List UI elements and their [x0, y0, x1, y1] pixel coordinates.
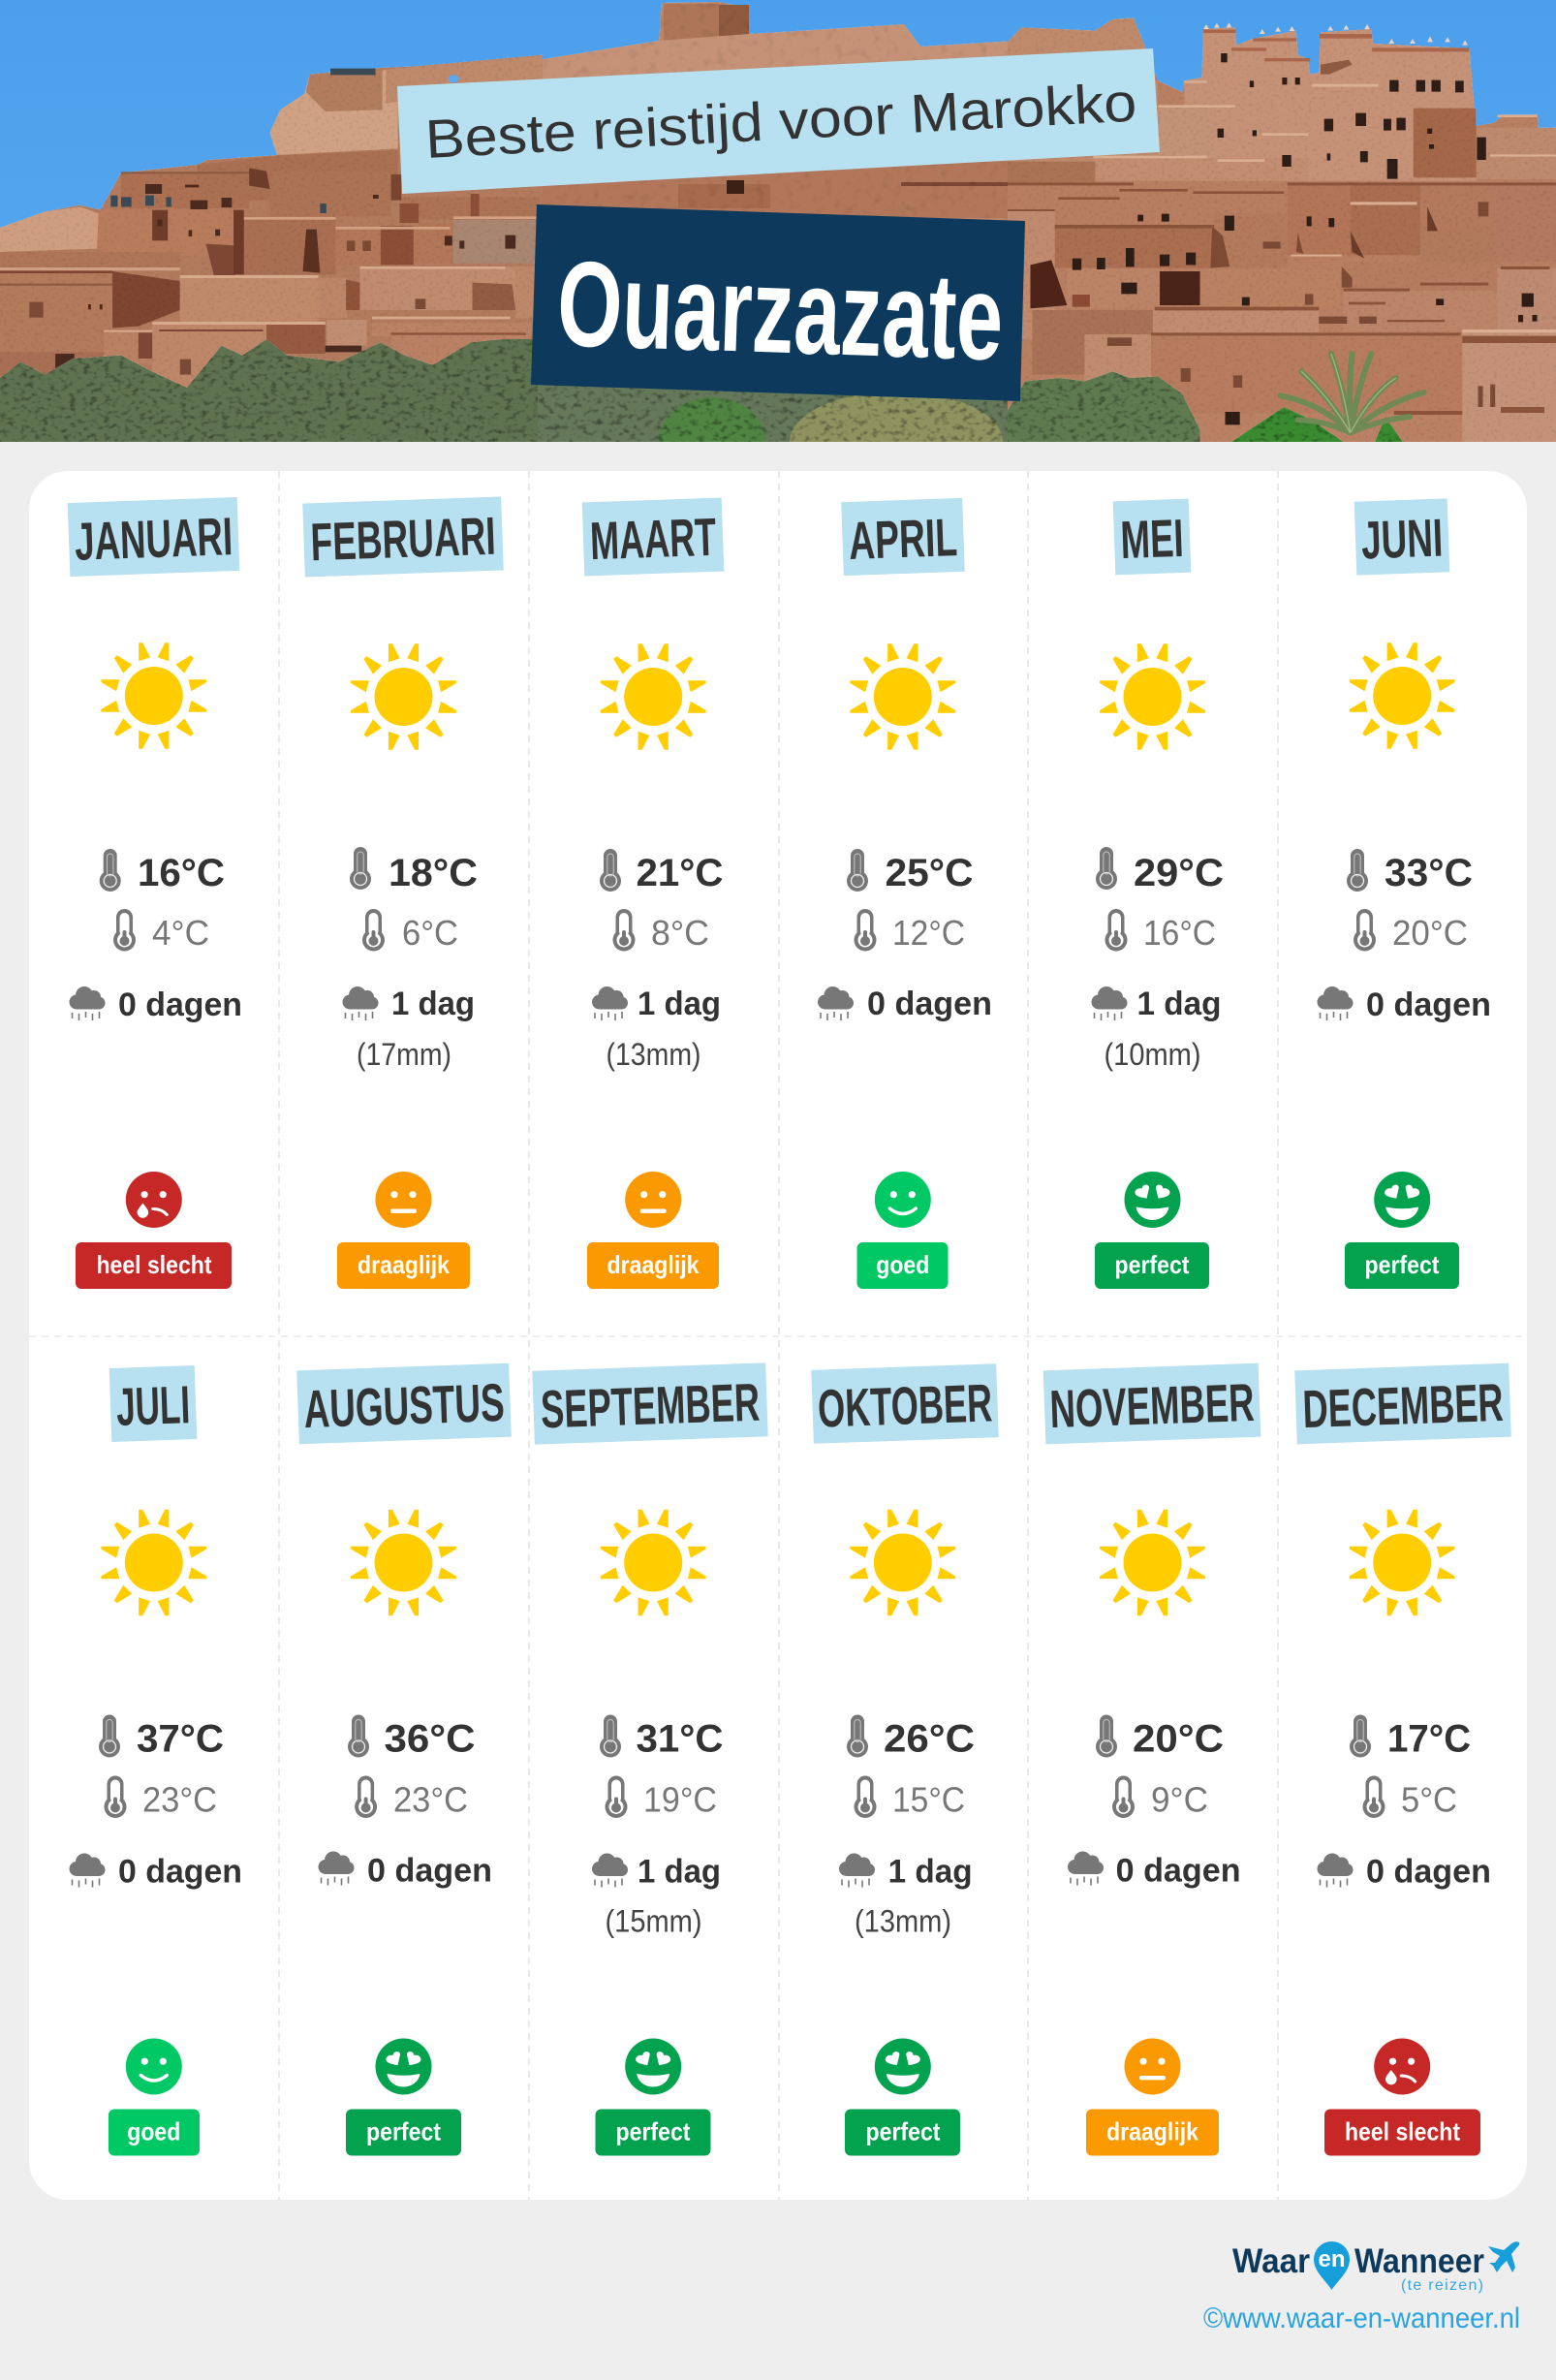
min temperature: 20°C [1392, 913, 1468, 953]
rating badge [856, 1242, 948, 1289]
rating badge [1345, 1242, 1459, 1289]
month label: APRIL [848, 507, 958, 571]
month label [811, 1363, 999, 1444]
photo: right section [1008, 17, 1556, 442]
month label: JUNI [1360, 508, 1444, 570]
icon: sun [1350, 1510, 1455, 1615]
month: juni [1318, 498, 1491, 1289]
trees right [1008, 371, 1200, 442]
rating badge [337, 1242, 470, 1289]
icon: min thermometer [1105, 909, 1128, 952]
max temperature: 31°C [636, 1717, 723, 1760]
icon: min thermometer [1112, 1775, 1135, 1818]
rating badge: goed [876, 1250, 929, 1279]
icon: sun [351, 643, 456, 750]
month label: JANUARI [74, 506, 233, 572]
icon: rain cloud [839, 1853, 875, 1888]
rain days: 0 dagen [1366, 1853, 1491, 1890]
icon: max thermometer [847, 849, 868, 892]
rating face: very bad [1374, 2039, 1430, 2095]
month label: FEBRUARI [310, 506, 497, 572]
month label: SEPTEMBER [540, 1372, 761, 1439]
month label [841, 498, 965, 576]
footer logo: Wanneer [1354, 2242, 1484, 2280]
rating badge: draaglijk [607, 1250, 700, 1279]
rain days: 1 dag [638, 1853, 721, 1890]
footer url: ©www.waar-en-wanneer.nl [1203, 2302, 1520, 2334]
month label [109, 1365, 197, 1442]
rating face: perfect [1374, 1172, 1430, 1228]
rating badge [109, 2109, 200, 2155]
rain days: 0 dagen [118, 986, 242, 1023]
panel: monthly climate grid [29, 471, 1527, 2200]
banner: subtitle [397, 48, 1160, 194]
icon: sun [101, 642, 206, 749]
rating badge [845, 2109, 960, 2155]
icon: rain cloud [318, 1851, 355, 1886]
rain days: 1 dag [638, 986, 721, 1022]
rating face: tolerable [376, 1172, 432, 1228]
row 2: juli to december [70, 1362, 1511, 2155]
icon: rain cloud [1068, 1851, 1104, 1886]
month: september [532, 1362, 768, 2155]
icon: min thermometer [612, 909, 636, 952]
rain days: 1 dag [391, 986, 475, 1022]
month label: MEI [1120, 508, 1185, 570]
icon: location pin [1314, 2241, 1350, 2290]
icon: max thermometer [100, 849, 121, 892]
icon: sun [351, 1510, 456, 1615]
icon: min thermometer [1354, 909, 1376, 952]
icon: max thermometer [1096, 1715, 1117, 1758]
rating face: perfect [376, 2039, 432, 2095]
rating badge: goed [127, 2116, 180, 2145]
rating face: tolerable [1124, 2039, 1180, 2095]
rating badge: perfect [1114, 1250, 1190, 1279]
icon: sun [101, 1510, 206, 1615]
month label: MAART [589, 507, 717, 571]
icon: min thermometer [113, 909, 136, 952]
banner: city title: Ouarzazate [555, 236, 1005, 386]
rain amount: (15mm) [605, 1903, 701, 1938]
icon: min thermometer [1362, 1775, 1385, 1818]
rating badge [587, 1242, 719, 1289]
rain days: 0 dagen [367, 1853, 492, 1890]
rain amount: (13mm) [855, 1903, 951, 1938]
icon: max thermometer [99, 1715, 120, 1758]
min temperature: 4°C [152, 913, 209, 953]
month label [1354, 498, 1449, 576]
icon: rain cloud [818, 986, 854, 1020]
rain days: 0 dagen [867, 986, 992, 1022]
month: maart [582, 498, 724, 1289]
month label [582, 498, 724, 576]
icon: max thermometer [348, 1715, 369, 1758]
header photo: kasbah [0, 0, 1556, 442]
icon: rain cloud [1091, 986, 1128, 1020]
icon: max thermometer [350, 847, 371, 890]
month: mei [1091, 499, 1224, 1289]
icon: rain cloud [592, 1853, 628, 1888]
trees left [0, 339, 543, 442]
rating badge: heel slecht [97, 1250, 212, 1279]
rating badge: draaglijk [1106, 2116, 1198, 2145]
max temperature: 25°C [886, 852, 973, 894]
icon: min thermometer [105, 1775, 126, 1818]
max temperature: 18°C [389, 852, 478, 894]
rating face: very bad [126, 1172, 182, 1228]
min temperature: 9°C [1151, 1779, 1208, 1820]
month label [1043, 1363, 1260, 1444]
icon: rain cloud [592, 986, 628, 1020]
month: februari [302, 496, 504, 1289]
rain days: 0 dagen [1116, 1853, 1241, 1890]
month label [532, 1362, 768, 1445]
icon: sun [1350, 642, 1455, 749]
month: juli [70, 1365, 242, 2155]
max temperature: 26°C [884, 1717, 975, 1760]
icon: sun [850, 1510, 955, 1615]
rain amount: (13mm) [607, 1037, 701, 1072]
rain amount: (10mm) [1105, 1037, 1201, 1072]
max temperature: 36°C [384, 1717, 475, 1760]
rating face: good [875, 1172, 931, 1228]
rating badge [1095, 1242, 1209, 1289]
photo: left section [0, 54, 543, 442]
icon: min thermometer [855, 1775, 876, 1818]
row 1: januari to juni [68, 496, 1491, 1289]
month: december [1294, 1363, 1511, 2155]
icon: max thermometer [600, 1715, 621, 1758]
icon: rain cloud [70, 1853, 105, 1888]
month: oktober [811, 1363, 999, 2155]
rating badge: perfect [866, 2116, 941, 2145]
photo: lower middle trees [538, 334, 1022, 442]
icon: rain cloud [1318, 986, 1353, 1020]
max temperature: 29°C [1134, 852, 1224, 894]
rating badge: heel slecht [1345, 2116, 1460, 2145]
footer logo: Waar [1232, 2242, 1310, 2280]
icon: max thermometer [1096, 847, 1117, 890]
icon: max thermometer [1347, 849, 1368, 892]
max temperature: 21°C [636, 852, 723, 894]
rating badge [1086, 2109, 1219, 2155]
icon: location pin: en [1318, 2246, 1346, 2272]
rating face: good [126, 2039, 182, 2095]
max temperature: 33°C [1385, 852, 1473, 894]
icon: airplane [1488, 2241, 1519, 2272]
icon: rain cloud [343, 986, 378, 1020]
rating face: perfect [875, 2039, 931, 2095]
banner: city title [531, 204, 1025, 401]
month label [296, 1363, 512, 1444]
footer logo [1232, 2241, 1519, 2294]
month label [1113, 499, 1191, 575]
rating badge [76, 1242, 232, 1289]
rain days: 0 dagen [1366, 986, 1491, 1023]
icon: sun [850, 643, 955, 750]
min temperature: 15°C [892, 1779, 965, 1820]
icon: min thermometer [605, 1775, 628, 1818]
month: april [818, 498, 992, 1289]
rating badge [595, 2109, 711, 2155]
icon: max thermometer [600, 849, 621, 892]
icon: sun [1100, 643, 1205, 750]
rating badge: perfect [616, 2116, 691, 2145]
rating face: perfect [1124, 1172, 1180, 1228]
month label: AUGUSTUS [303, 1372, 506, 1439]
month: augustus [296, 1363, 512, 2155]
max temperature: 17°C [1387, 1717, 1471, 1760]
month label [302, 496, 504, 578]
icon: sun [1100, 1510, 1205, 1615]
icon: rain cloud [70, 986, 105, 1020]
icon: min thermometer [355, 1775, 377, 1818]
min temperature: 16°C [1143, 913, 1216, 953]
icon: min thermometer [855, 909, 876, 952]
icon: max thermometer [847, 1715, 868, 1758]
month: november [1043, 1363, 1260, 2155]
icon: sun [601, 643, 706, 750]
month label: JULI [115, 1374, 191, 1437]
min temperature: 8°C [651, 913, 709, 953]
rain days: 1 dag [888, 1853, 973, 1890]
month label [68, 497, 239, 577]
rating badge: draaglijk [358, 1250, 450, 1279]
photo: middle section [397, 2, 1017, 442]
max temperature: 37°C [137, 1717, 224, 1760]
rating badge [346, 2109, 461, 2155]
rating badge: perfect [1364, 1250, 1440, 1279]
min temperature: 23°C [393, 1779, 468, 1820]
footer logo: (te reizen) [1401, 2277, 1483, 2294]
rating badge: perfect [366, 2116, 441, 2145]
month label: NOVEMBER [1049, 1372, 1256, 1439]
rain days: 0 dagen [118, 1853, 242, 1890]
icon: min thermometer [362, 909, 385, 952]
min temperature: 19°C [643, 1779, 717, 1820]
icon: sun [601, 1510, 706, 1615]
min temperature: 12°C [892, 913, 965, 953]
month: januari [68, 497, 242, 1289]
rain amount: (17mm) [357, 1037, 451, 1072]
rain days: 1 dag [1137, 986, 1221, 1022]
icon: max thermometer [1350, 1715, 1371, 1758]
rating badge [1324, 2109, 1480, 2155]
max temperature: 16°C [138, 852, 225, 894]
rating face: tolerable [625, 1172, 681, 1228]
min temperature: 5°C [1401, 1779, 1457, 1820]
month label: OKTOBER [817, 1372, 993, 1439]
banner: subtitle: Beste reistijd voor Marokko [423, 72, 1138, 170]
rating face: perfect [625, 2039, 681, 2095]
max temperature: 20°C [1133, 1717, 1224, 1760]
min temperature: 6°C [402, 913, 458, 953]
icon: rain cloud [1318, 1853, 1353, 1888]
min temperature: 23°C [142, 1779, 217, 1820]
